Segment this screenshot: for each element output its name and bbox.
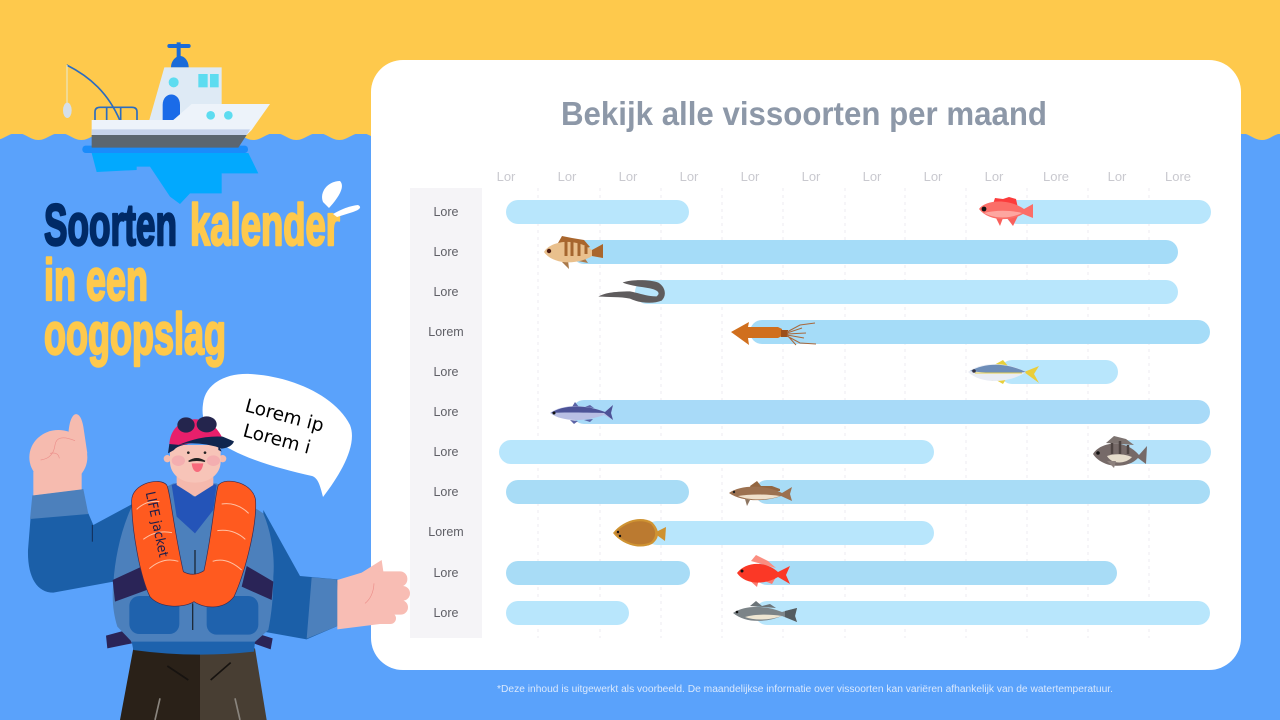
month header labels: Lor [497, 169, 516, 184]
species label column: Lore [433, 285, 459, 299]
life jacket: LIFE jacket [142, 490, 170, 559]
head [164, 416, 234, 497]
side tabs [106, 630, 273, 649]
icon: eel [598, 280, 665, 303]
species label column: Lore [433, 405, 459, 419]
speech bubble: Lorem i [241, 421, 313, 459]
main title [44, 193, 340, 367]
trousers [120, 648, 267, 720]
pockets [129, 596, 258, 635]
month header labels [497, 169, 1191, 184]
icon: water splash [322, 181, 360, 217]
species label column: Lore [433, 205, 459, 219]
month header labels: Lor [924, 169, 943, 184]
species label column: Lore [433, 365, 459, 379]
species label column: Lore [433, 485, 459, 499]
main title: in een [44, 248, 148, 313]
speech bubble [203, 374, 352, 497]
month header labels: Lor [680, 169, 699, 184]
open hand [337, 560, 410, 629]
panel heading: Bekijk alle vissoorten per maand [561, 95, 1047, 132]
main title: Soorten [44, 193, 177, 258]
species label column: Lorem [428, 525, 464, 539]
fisherman illustration [28, 414, 410, 720]
right arm [263, 510, 340, 639]
species label column: Lore [433, 606, 459, 620]
fishing boat [63, 42, 270, 204]
icon: mackerel [550, 402, 613, 424]
month header labels: Lor [863, 169, 882, 184]
main title: oogopslag [44, 302, 226, 367]
icon: yellowtail fish [968, 360, 1039, 384]
main title: kalender [190, 193, 340, 258]
month header labels: Lor [558, 169, 577, 184]
icon: squid [731, 322, 816, 345]
speech bubble: Lorem ip [243, 396, 326, 437]
species label column: Lore [433, 566, 459, 580]
panel: calendar card [371, 60, 1241, 670]
species label column: Lore [433, 445, 459, 459]
species label column: Lore [433, 245, 459, 259]
month header labels: Lor [985, 169, 1004, 184]
sweater hem [132, 642, 255, 655]
month header labels: Lore [1165, 169, 1191, 184]
icon: grey rockfish [1093, 436, 1147, 468]
season bars [499, 200, 1211, 625]
icon: grey bass [733, 601, 797, 622]
species label column: Lorem [428, 325, 464, 339]
left arm [28, 489, 137, 593]
footnote: *Deze inhoud is uitgewerkt als voorbeeld. De maandelijkse informatie over vissoorten kan variëren afhankelijk van de watertemperatuur. [497, 684, 1113, 695]
species label column [410, 188, 482, 638]
month header labels: Lor [741, 169, 760, 184]
month header labels: Lor [1108, 169, 1127, 184]
month header labels: Lor [619, 169, 638, 184]
month header labels: Lore [1043, 169, 1069, 184]
icon: cod [729, 481, 792, 506]
raised hand [29, 414, 87, 495]
straps [113, 566, 273, 602]
vest [113, 483, 274, 643]
month header labels: Lor [802, 169, 821, 184]
icon: red snapper [737, 555, 790, 587]
shirt collar [172, 483, 217, 533]
life jacket [132, 481, 256, 607]
yellow sky with wave edge [0, 0, 1280, 140]
icon: red rockfish [979, 197, 1033, 226]
icon: brown striped fish [544, 236, 603, 269]
icon: flounder [613, 519, 666, 547]
